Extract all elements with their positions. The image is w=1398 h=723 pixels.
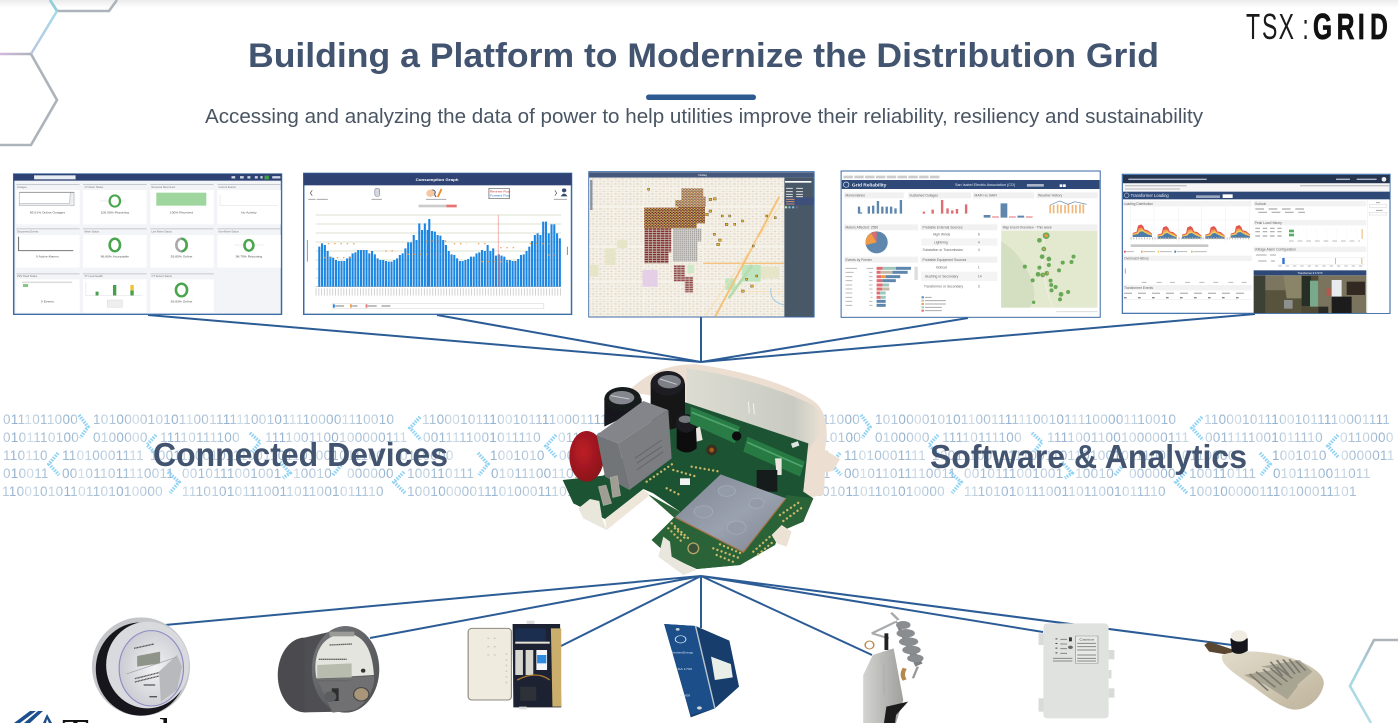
- binary band: right: 010011: [785, 466, 831, 481]
- panel: grid reliability dashboard screenshot: Meters Affected: 2556: [846, 226, 878, 230]
- panel: meter dashboard screenshot: 100% Received: [170, 210, 193, 214]
- device: white communications box: [1039, 623, 1114, 718]
- panel: grid reliability dashboard screenshot: [841, 171, 1100, 317]
- panel: grid reliability dashboard screenshot: Bobcat: [936, 266, 947, 270]
- panel: meter dashboard screenshot: Line Meter Status: [151, 230, 173, 233]
- panel: meter dashboard screenshot: CT Sensor Status: [151, 275, 173, 278]
- panel: meter dashboard screenshot: VT Level Health: [84, 275, 103, 278]
- binary band: right: 1001000001110100011101: [1189, 484, 1357, 499]
- device: open enclosure: [468, 621, 561, 709]
- device: smart street light: [1204, 630, 1324, 710]
- binary band: left: 11010001111: [62, 448, 144, 463]
- binary band: right: 110010101101101010000: [784, 484, 945, 499]
- panel: meter dashboard screenshot: Meter Status: [84, 230, 100, 233]
- shield: silver RF can: [675, 474, 786, 552]
- binary band: left: 0010111001001: [182, 466, 282, 481]
- binary band: right: 10010: [1075, 466, 1114, 481]
- connector lines: device to field equipment: [165, 576, 1232, 655]
- device: digital electric meter: [92, 617, 190, 716]
- panel: transformer loading screenshot: Transformer # 17270: [1298, 271, 1323, 275]
- shell: cream housing: [628, 364, 840, 498]
- decoration: top-left hexagons: [0, 0, 117, 145]
- binary band: left: 010011: [3, 466, 49, 481]
- component: gray capacitor box: [597, 401, 668, 443]
- panel: grid reliability dashboard screenshot: Momentaries: [846, 194, 865, 198]
- panel: outage map screenshot: [589, 172, 814, 317]
- binary band: left: 0101110011011: [491, 466, 588, 481]
- panel: grid reliability dashboard screenshot: 6: [978, 233, 980, 237]
- panel: meter dashboard screenshot: Outages: [17, 186, 28, 189]
- binary band: right: 100110111: [1189, 466, 1256, 481]
- panel: meter dashboard screenshot: Received Reconnect: [151, 186, 176, 189]
- component: rear capacitors: [604, 398, 642, 427]
- panel: grid reliability dashboard screenshot: Substation or Transmission: [923, 248, 963, 252]
- binary band: left: 1001010: [490, 448, 545, 463]
- binary band: right: 0011111001011110: [1205, 430, 1323, 445]
- binary band: left: 1001110010111001101101001011100: [150, 448, 384, 463]
- panel: grid reliability dashboard screenshot: 1: [978, 266, 980, 270]
- device: blue line sensor: POWER: [680, 694, 690, 697]
- binary band: right: 110110: [785, 448, 830, 463]
- binary band: right: 0110000: [1182, 448, 1236, 463]
- binary band: left: 001011011110011: [62, 466, 174, 481]
- panel: consumption graph screenshot: Forward Flow: [490, 194, 511, 198]
- heading: Software & Analytics: Software & Analytics: [930, 439, 1247, 476]
- device: blue line sensor: DA 1700: [678, 668, 692, 671]
- panel: meter dashboard screenshot: Current Events: [219, 186, 237, 189]
- panel: grid reliability dashboard screenshot: Grid Reliability: [852, 182, 887, 187]
- panel: meter dashboard screenshot: 0 Events: [41, 300, 54, 304]
- panel: transformer loading screenshot: [1122, 174, 1390, 313]
- panel: grid reliability dashboard screenshot: San Isabel Electric Association (CO): [955, 183, 1015, 187]
- binary band: right: 0100000: [875, 430, 930, 445]
- connector lines: software screens to device: [148, 314, 1255, 362]
- panel: meter dashboard screenshot: PRV Read Status: [17, 275, 38, 278]
- panel: consumption graph screenshot: [304, 173, 572, 314]
- panel: transformer loading screenshot: Outlook: [1255, 202, 1266, 206]
- panel: grid reliability dashboard screenshot: Map Event Overview - This week: [1003, 226, 1052, 230]
- panel: grid reliability dashboard screenshot: 4: [978, 240, 980, 244]
- binary band: right: 0101110100: [785, 430, 861, 445]
- binary band: right: 1100010111001011110001111: [1204, 412, 1390, 427]
- panel: meter dashboard screenshot: Non-Meter Status: [219, 230, 240, 233]
- binary band: left: [2, 412, 613, 499]
- panel: consumption graph screenshot: Reverse Flow: [490, 189, 511, 193]
- logo: TSX:GRID: [1246, 6, 1388, 47]
- binary band: right: 0110000: [1340, 430, 1394, 445]
- binary band: left: 11110111100: [160, 430, 240, 445]
- panel: meter dashboard screenshot: 85.01% Online Outages: [30, 210, 65, 214]
- panel: meter dashboard screenshot: 98.79% Reporting: [236, 255, 262, 259]
- panel: transformer loading screenshot: Loading Distribution: [1124, 202, 1153, 206]
- binary band: left: 110010101101101010000: [2, 484, 163, 499]
- binary band: left: 0011111001011110: [423, 430, 541, 445]
- component: small capacitor: [677, 423, 697, 452]
- logo: TSX:GRID: TSX:: [1246, 8, 1309, 47]
- panel: grid reliability dashboard screenshot: MAIFI vs SAIFI: [975, 194, 997, 198]
- heading: Connected Devices: Connected Devices: [153, 437, 448, 474]
- panel: outage map screenshot: Outlay: [698, 173, 708, 177]
- binary band: left: 0110000: [558, 430, 612, 445]
- binary band: right: 000000: [1129, 466, 1176, 481]
- binary band: right: 001011011110011: [844, 466, 956, 481]
- device: central smart grid sensor board: [563, 364, 840, 575]
- clips: white feet: [578, 499, 607, 530]
- panel: grid reliability dashboard screenshot: 4: [978, 248, 980, 252]
- binary band: right: 0010111001001: [964, 466, 1064, 481]
- panel: grid reliability dashboard screenshot: 14: [978, 275, 982, 279]
- panel: meter dashboard screenshot: [14, 174, 282, 314]
- binary band: left: 0100000: [93, 430, 148, 445]
- panel: transformer loading screenshot: Transformer Loading: [1131, 193, 1169, 198]
- panel: grid reliability dashboard screenshot: Transformer or Secondary: [924, 285, 963, 289]
- panel: meter dashboard screenshot: 100.00% Reporting: [101, 210, 129, 214]
- binary band: left: 110110: [3, 448, 48, 463]
- board: green circuit board: [563, 402, 813, 569]
- binary band: right: 11110111100: [942, 430, 1022, 445]
- panel: meter dashboard screenshot: 96.80% Acceptable: [101, 255, 129, 259]
- device: blue line sensor: [664, 624, 739, 717]
- binary band: left: 10010: [293, 466, 332, 481]
- panel: transformer loading screenshot: Peak Load History: [1255, 221, 1282, 225]
- panel: meter dashboard screenshot: 93.83% Online: [171, 300, 193, 304]
- panel: grid reliability dashboard screenshot: Probable External Sources: [923, 226, 963, 230]
- binary band: right: 11010001111: [844, 448, 926, 463]
- binary band: right: 1010000101011001111110010111100001110010: [875, 412, 1176, 427]
- panel: grid reliability dashboard screenshot: Sustained Outages: [909, 194, 938, 198]
- panel: meter dashboard screenshot: CT Meter Status: [84, 186, 104, 189]
- device: white communications box: Caution: [1079, 638, 1094, 641]
- panel: meter dashboard screenshot: No Activity: [241, 210, 257, 214]
- binary band: left: 000000: [347, 466, 394, 481]
- panel: grid reliability dashboard screenshot: 3: [978, 285, 980, 289]
- binary band: left: 0111011000: [3, 412, 78, 427]
- device: blue line sensor: SentientEnergy: [671, 651, 693, 654]
- binary band: left: 100110111: [407, 466, 474, 481]
- title: Building a Platform to Modernize the Distribution Grid: [248, 37, 1159, 75]
- binary band: right: 0111011000: [785, 412, 860, 427]
- binary band: left: 1010000101011001111110010111100001110010: [93, 412, 394, 427]
- panel: grid reliability dashboard screenshot: Probable Equipment Sources: [923, 258, 967, 262]
- binary band: right: 0101110011011: [1273, 466, 1370, 481]
- binary band: left: 0101110100: [3, 430, 79, 445]
- decoration: bottom-right hexagon: [1350, 640, 1398, 723]
- binary band: left: 1100010111001011110001111: [422, 412, 608, 427]
- binary band: right: 0000011: [1341, 448, 1395, 463]
- panel: meter dashboard screenshot: 93.85% Online: [171, 255, 193, 259]
- component: green cylinders: [690, 407, 740, 443]
- title divider: [646, 94, 756, 100]
- binary band: right: 1001110010111001101101001011100: [932, 448, 1166, 463]
- top shaded band: [0, 0, 1398, 8]
- panel: transformer loading screenshot: Overload History: [1124, 257, 1149, 261]
- panel: grid reliability dashboard screenshot: Weather History: [1038, 194, 1062, 198]
- component: red varistor disc: [569, 431, 604, 482]
- panel: grid reliability dashboard screenshot: Lightning: [934, 240, 948, 244]
- panel: grid reliability dashboard screenshot: Events by Feeder: [846, 258, 873, 262]
- panel: meter dashboard screenshot: 0 Active Alarms: [36, 255, 59, 259]
- binary band: right: 1111001100100000111: [1047, 430, 1189, 445]
- panel: meter dashboard screenshot: Disconnect Events: [17, 230, 39, 233]
- panel: transformer loading screenshot: Voltage Alarm Configuration: [1255, 248, 1296, 252]
- device: line recloser: [863, 613, 924, 723]
- panel: grid reliability dashboard screenshot: High Winds: [933, 233, 951, 237]
- panel: transformer loading screenshot: Transformer Events: [1124, 286, 1153, 290]
- binary band: left: 111010101110011011001011110: [182, 484, 384, 499]
- binary band: right: [784, 412, 1395, 499]
- binary band: left: 0110000: [400, 448, 454, 463]
- details: gold pads and terminals: [647, 463, 803, 563]
- subtitle: Accessing and analyzing the data of power to help utilities improve their reliability, resiliency and sustainability: [205, 105, 1204, 128]
- binary band: left: 0000011: [559, 448, 613, 463]
- panel: consumption graph screenshot: Consumption Graph: [416, 177, 459, 182]
- logo: TSX:GRID: GRID: [1313, 6, 1388, 47]
- panel: grid reliability dashboard screenshot: Bushing or Secondary: [925, 275, 959, 279]
- binary band: left: 1001000001110100011101: [407, 484, 575, 499]
- device: gray utility meter: [278, 626, 379, 713]
- binary band: left: 1111001100100000111: [265, 430, 407, 445]
- binary band: right: 111010101110011011001011110: [964, 484, 1166, 499]
- binary band: right: 1001010: [1272, 448, 1327, 463]
